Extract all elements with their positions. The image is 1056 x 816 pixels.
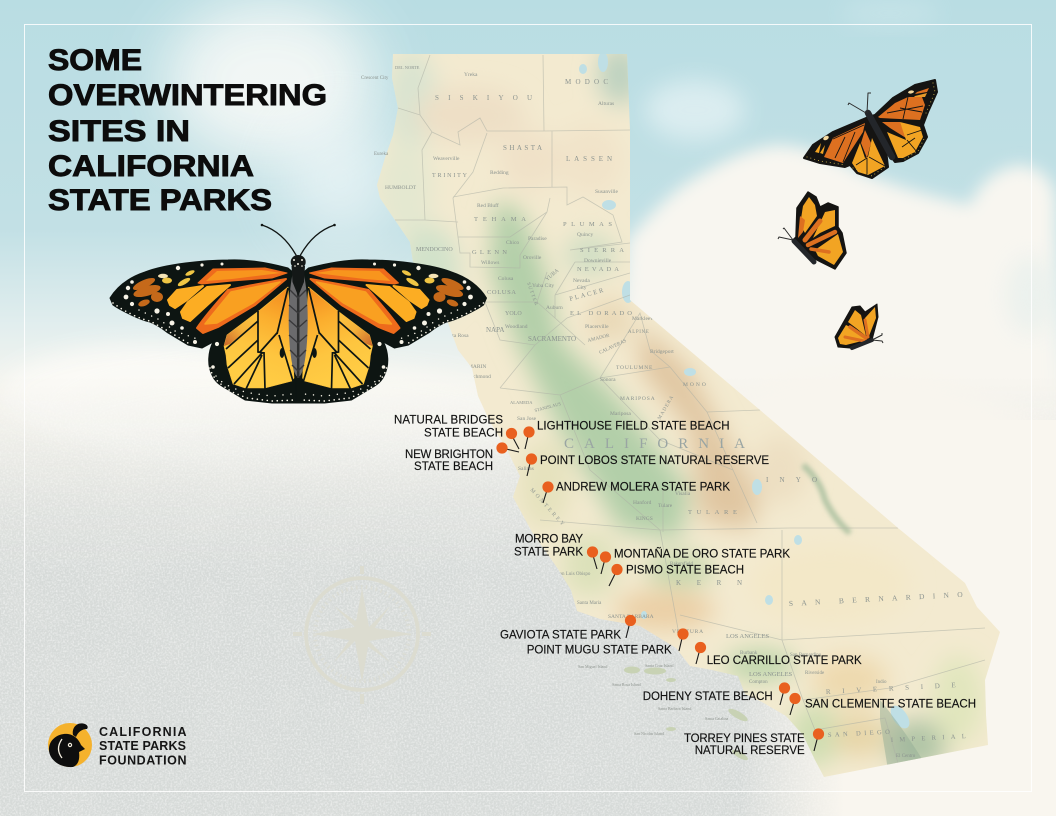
county and city labels: NEVADA	[577, 266, 619, 273]
county and city labels: Riverside	[805, 671, 825, 676]
county and city labels: SAN DIEGO	[828, 729, 890, 739]
map title: California: CALIFORNIA	[564, 436, 745, 452]
wing black base	[110, 260, 302, 403]
county and city labels: Alturas	[598, 101, 614, 107]
county and city labels: Monterey	[497, 477, 515, 482]
county and city labels: Markleeville	[632, 316, 661, 322]
hindwing orange-brown cell	[224, 312, 258, 346]
title: CALIFORNIA	[48, 150, 254, 183]
county and city labels: MODOC	[565, 78, 608, 86]
offshore labels and islands: Santa Rosa Island	[612, 682, 641, 687]
offshore labels and islands: San Nicolas Island	[634, 731, 664, 736]
offshore labels and islands: Santa Cruz Island	[645, 663, 673, 668]
county and city labels: TULARE	[688, 509, 737, 516]
county and city labels: Chico	[506, 240, 519, 246]
county and city labels: Indio	[876, 680, 887, 685]
site labels: DOHENY STATE BEACH	[643, 691, 773, 703]
county and city labels: Richmond	[468, 374, 491, 380]
county and city labels: LOS ANGELES	[749, 671, 793, 678]
title: OVERWINTERING	[48, 79, 327, 112]
county and city labels: Red Bluff	[477, 202, 499, 209]
large monarch butterfly	[110, 224, 486, 403]
county and city labels: HUMBOLDT	[385, 185, 417, 191]
county and city labels: LASSEN	[566, 155, 612, 163]
county and city labels: Salinas	[518, 466, 534, 472]
county and city labels: Quincy	[577, 232, 593, 238]
county and city labels: City	[577, 285, 587, 291]
county and city labels: San Luis Obispo	[557, 572, 591, 577]
county and city labels: San Bernardino	[790, 653, 822, 658]
county and city labels: Yreka	[464, 72, 478, 78]
county and city labels: Redding	[490, 170, 509, 176]
county and city labels: ALPINE	[628, 330, 649, 335]
county and city labels: Susanville	[595, 189, 618, 195]
county and city labels: Downieville	[584, 258, 612, 264]
title: SITES IN	[48, 115, 190, 148]
county and city labels: San Diego	[788, 757, 811, 763]
county and city labels: Bridgeport	[650, 349, 674, 355]
county and city labels	[385, 65, 966, 763]
county and city labels: Santa Maria	[577, 601, 602, 606]
county and city labels: TOULUMNE	[616, 365, 653, 371]
county and city labels: SACRAMENTO	[528, 335, 576, 343]
county and city labels: GLENN	[472, 249, 507, 256]
county and city labels: TEHAMA	[474, 216, 526, 223]
county and city labels: Colusa	[498, 276, 514, 282]
Owens valley	[803, 465, 850, 533]
ocean relief texture	[0, 433, 819, 816]
county and city labels: MARIPOSA	[620, 396, 656, 402]
site labels: NEW BRIGHTON	[405, 449, 493, 461]
site labels: NATURAL BRIDGES	[394, 414, 503, 426]
antenna	[262, 225, 296, 255]
title: STATE PARKS	[48, 184, 272, 217]
logo wordmark: FOUNDATION	[99, 753, 186, 767]
water bodies	[579, 52, 913, 732]
county and city labels: Santa Rosa	[444, 333, 469, 339]
county and city labels: SIERRA	[580, 247, 624, 254]
site labels: SAN CLEMENTE STATE BEACH	[805, 699, 976, 711]
county and city labels: PLUMAS	[563, 221, 612, 228]
county and city labels: Nevada	[573, 278, 590, 284]
county and city labels: SAN FRANCISCO	[423, 390, 471, 396]
county and city labels: MONO	[683, 382, 708, 388]
county and city labels: Sonora	[600, 377, 616, 383]
site labels: LEO CARRILLO STATE PARK	[707, 655, 862, 667]
county and city labels: MENDOCINO	[416, 247, 453, 253]
terrain colour wash	[377, 45, 984, 771]
logo icon: quail	[48, 723, 92, 767]
county and city labels: YUBA	[544, 268, 560, 283]
map pins	[496, 426, 824, 751]
forewing tip spots	[131, 276, 163, 308]
county and city labels: Burbank	[740, 651, 758, 656]
county and city labels: STANISLAUS	[534, 401, 562, 413]
county and city labels: RIVERSIDE	[826, 681, 956, 696]
white edge dots	[124, 262, 224, 369]
county and city labels: Woodland	[505, 324, 528, 330]
county and city labels: El Centro	[896, 754, 916, 759]
site labels: TORREY PINES STATE	[684, 733, 805, 745]
map of California	[377, 54, 1000, 777]
county and city labels: Placerville	[585, 324, 609, 330]
county and city labels: DEL NORTE	[395, 65, 420, 70]
site labels: NATURAL RESERVE	[695, 745, 805, 757]
county and city labels: Willows	[481, 260, 499, 266]
site labels: POINT MUGU STATE PARK	[527, 645, 672, 657]
title	[48, 44, 327, 217]
hindwing veins	[226, 288, 293, 389]
county and city labels: Yuba City	[532, 283, 554, 289]
site labels: PISMO STATE BEACH	[626, 565, 744, 577]
hindwing yellow area	[224, 287, 294, 388]
forewing orange cells	[198, 268, 287, 284]
county and city labels: Tulare	[658, 503, 673, 509]
compass rose	[293, 566, 431, 704]
county and city labels: SUTTER	[525, 282, 538, 307]
county and city labels: TRINITY	[432, 173, 468, 179]
county and city labels: SAN BERNARDINO	[789, 590, 963, 608]
county and city labels: Visalia	[675, 491, 691, 497]
offshore labels and islands: Santa Catalina	[705, 716, 728, 721]
offshore labels and islands: Crescent City	[361, 76, 389, 81]
county and city labels: LOS ANGELES	[726, 633, 770, 640]
county and city labels: NAPA	[486, 326, 504, 334]
county and city labels: COLUSA	[487, 289, 517, 296]
body	[289, 255, 308, 378]
county and city labels: MONTEREY	[529, 487, 567, 529]
county and city labels: SISKIYOU	[435, 94, 532, 102]
county and city labels: Oroville	[523, 255, 542, 261]
county and city labels: INYO	[766, 476, 817, 484]
county and city labels: MARIN	[468, 364, 486, 370]
mirrored right wings	[294, 224, 486, 403]
county and city labels: Mariposa	[610, 411, 631, 417]
site labels: ANDREW MOLERA STATE PARK	[556, 482, 730, 494]
logo wordmark: CALIFORNIA	[99, 725, 186, 739]
county and city labels: KINGS	[636, 516, 653, 522]
logo wordmark: STATE PARKS	[99, 739, 186, 753]
county and city labels: PLACER	[569, 287, 606, 303]
small monarch: middle	[778, 192, 846, 269]
site labels: POINT LOBOS STATE NATURAL RESERVE	[540, 455, 769, 467]
county and city labels: MADERA	[657, 395, 676, 421]
site labels	[394, 414, 976, 757]
cream fade at lower right	[664, 370, 1056, 816]
county and city labels: SHASTA	[503, 144, 542, 152]
site labels: MONTAÑA DE ORO STATE PARK	[614, 548, 790, 561]
site labels: MORRO BAY	[515, 534, 583, 546]
county and city labels: ALAMEDA	[510, 400, 533, 405]
site labels: STATE BEACH	[414, 461, 493, 473]
county and city labels: Hanford	[633, 499, 652, 506]
county and city labels: KERN	[676, 579, 742, 587]
county and city labels: SANTA BARBARA	[608, 614, 654, 620]
county and city labels: Auburn	[546, 305, 563, 311]
offshore labels and islands: San Miguel Island	[578, 664, 607, 669]
county and city labels: EL DORADO	[570, 310, 632, 317]
county and city labels: San Jose	[517, 416, 537, 422]
county lines	[395, 55, 985, 770]
small monarch: top	[804, 80, 937, 178]
county and city labels: IMPERIAL	[891, 733, 966, 744]
site labels: GAVIOTA STATE PARK	[500, 630, 621, 642]
title: SOME	[48, 44, 142, 77]
county and city labels: AMADOR	[587, 334, 611, 344]
county and city labels: Paradise	[528, 236, 547, 242]
county and city labels: CALAVERAS	[599, 339, 628, 356]
offshore labels and islands: Santa Barbara Island	[658, 706, 691, 711]
county and city labels: YOLO	[505, 311, 522, 317]
site labels: STATE PARK	[514, 547, 583, 559]
site labels: LIGHTHOUSE FIELD STATE BEACH	[537, 420, 730, 432]
small monarch: bottom	[835, 304, 883, 348]
county and city labels: Bakersfield	[670, 562, 694, 567]
county and city labels: VENTURA	[672, 629, 704, 635]
logo wordmark	[99, 725, 186, 767]
offshore labels and islands: Eureka	[374, 152, 389, 157]
county and city labels: Weaverville	[433, 156, 460, 162]
site labels: STATE BEACH	[424, 427, 503, 439]
county and city labels: Compton	[749, 680, 768, 685]
offshore labels and islands	[361, 76, 749, 762]
logo: California State Parks Foundation	[48, 723, 186, 767]
